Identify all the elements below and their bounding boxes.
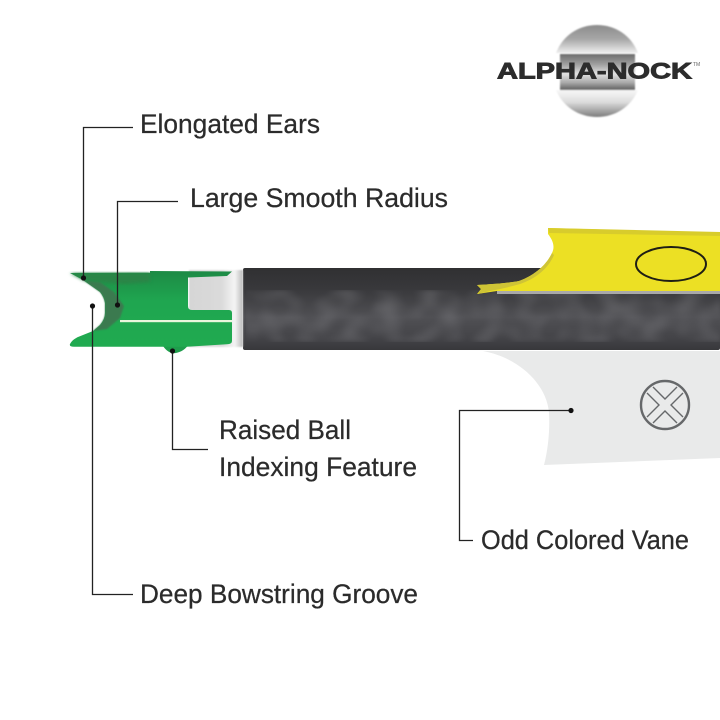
carbon weave texture [246,290,720,342]
label: Odd Colored Vane: Odd Colored Vane [481,525,689,555]
logo trademark: TM [693,62,700,68]
raised ball [163,345,188,353]
vane base strip [497,291,720,294]
collar between nock and shaft [189,270,243,347]
label: Large Smooth Radius: Large Smooth Radius [190,183,448,213]
logo wordmark: ALPHA-NOCK [497,58,692,84]
yellow vane [477,228,720,294]
leader: Large Smooth Radius [115,202,178,308]
leader: Raised Ball Indexing Feature [170,348,208,450]
green nock [70,271,232,353]
inner groove shading [83,280,124,331]
leader: Elongated Ears [81,128,133,281]
white highlight line [120,320,232,322]
arrow shaft [243,268,720,350]
vane top edge [548,228,720,236]
yellow vane ellipse mark [636,247,706,281]
leader: Odd Colored Vane [460,408,574,540]
upper ear shading [70,273,150,284]
label: Raised Ball Indexing Feature: Raised Ball [219,415,351,445]
leader: Deep Bowstring Groove [90,303,133,594]
vane curved edge [477,253,554,294]
label: Deep Bowstring Groove: Deep Bowstring Groove [140,579,418,609]
white odd colored vane [483,351,720,465]
nock body [70,271,232,347]
logo: Alpha-Nock [497,25,700,117]
vane body [477,228,720,294]
logo sphere [556,25,638,117]
vane cross-in-circle mark [641,381,689,429]
label: Raised Ball Indexing Feature: Indexing Feature [219,452,417,482]
label: Elongated Ears: Elongated Ears [140,109,320,139]
